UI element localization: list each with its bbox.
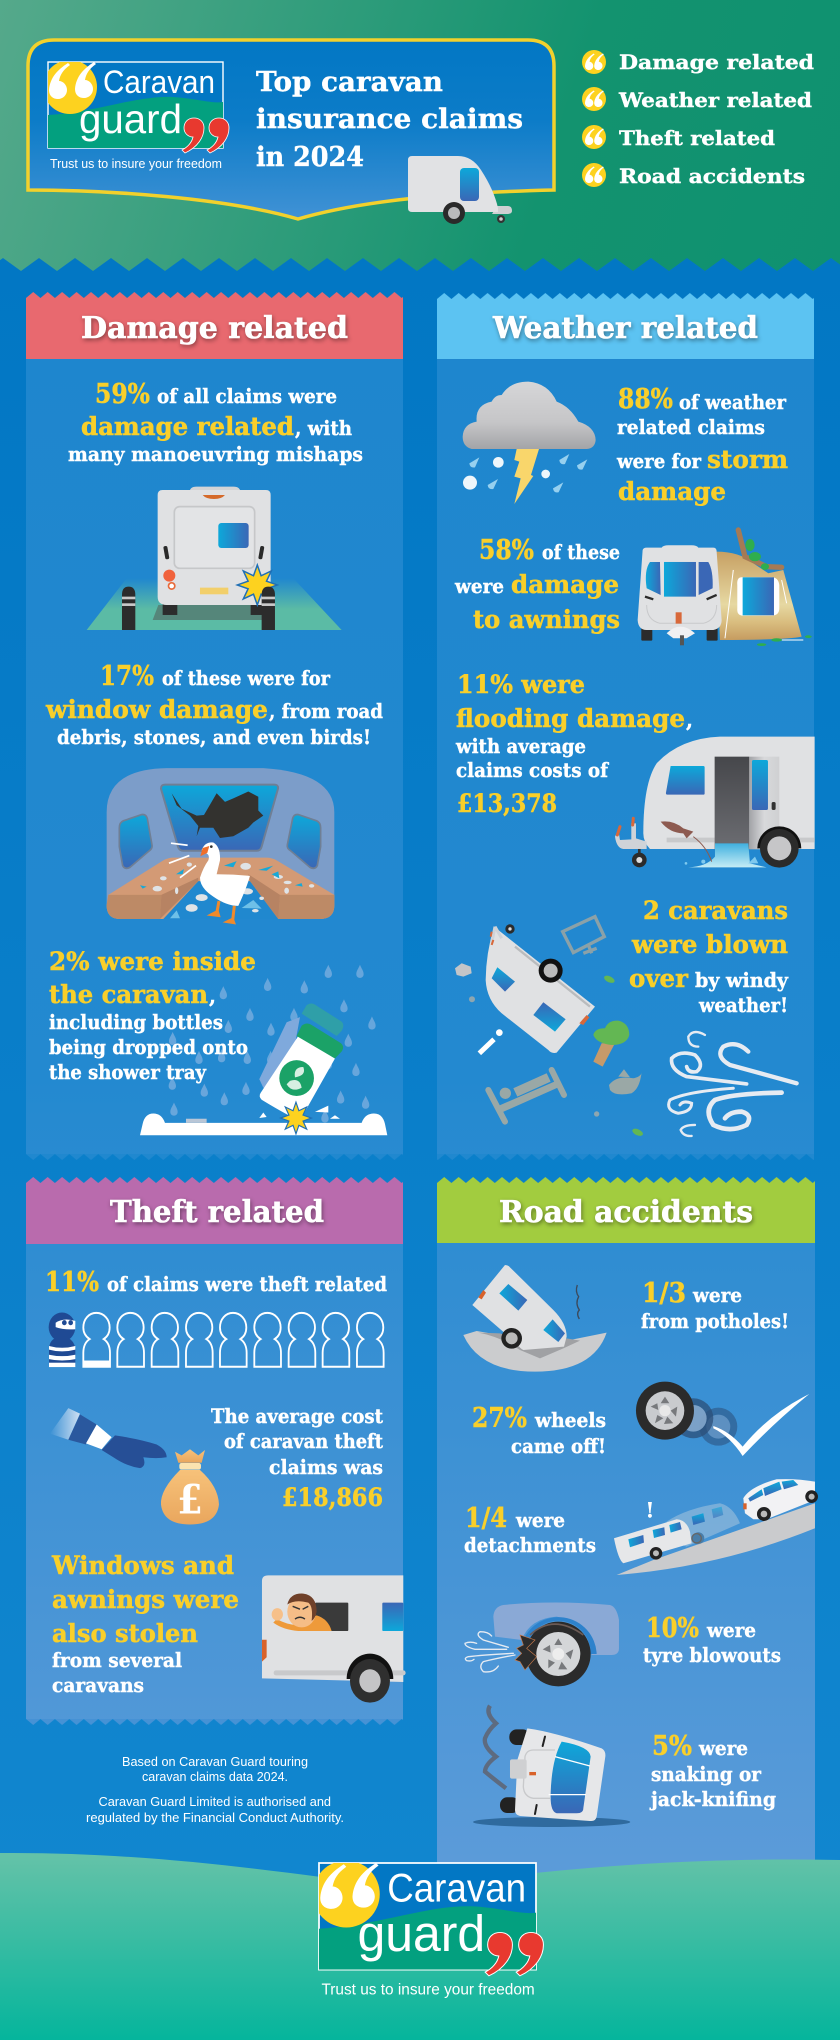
title: in 2024: [256, 142, 364, 173]
illustration: detached caravan on a slope: [614, 1479, 818, 1575]
text: 11% of claims: [45, 1267, 387, 1298]
title: [256, 67, 523, 173]
text: windows and awnings stolen: caravans: [52, 1673, 144, 1697]
text: 17% window damage: debris, stones, and even birds!: [57, 725, 371, 749]
text: 59% of claims: [68, 379, 363, 466]
pictogram: 1 in 10 figures: [49, 1313, 384, 1367]
text: 11% flooding damage: £13,378: [457, 789, 557, 818]
footnote text: caravan claims data 2024.: [142, 1770, 288, 1784]
text: 11% of claims: of claims were theft related: [107, 1272, 387, 1296]
illustration: caravan in pothole: [463, 1265, 607, 1372]
logo: footer Caravan Guard: Trust us to insure your freedom: [321, 1981, 535, 1998]
text: 27% wheels came off: [472, 1403, 606, 1458]
illustration: tyre blowout: [465, 1602, 630, 1827]
legend list: Road accidents: [619, 164, 805, 188]
text: 88% storm damage: [616, 384, 788, 506]
title: Top caravan: [256, 67, 443, 98]
text: 11% flooding damage: with average: [455, 734, 586, 758]
logo: footer Caravan Guard: guard: [357, 1905, 485, 1962]
text: windows and awnings stolen: from several: [52, 1648, 182, 1672]
text: 88% storm damage: related claims: [617, 415, 765, 439]
text: 1/3 potholes: from potholes!: [641, 1309, 789, 1333]
legend list: Theft related: [619, 126, 775, 150]
text: 2% inside the caravan: [49, 947, 256, 1084]
logo: Caravan Guard: Trust us to insure your freedom: [50, 157, 222, 171]
logo: footer Caravan Guard: [313, 1861, 543, 1998]
panel: road accidents: [437, 1177, 818, 1883]
text: 2 caravans blown over: were blown: [631, 930, 788, 959]
text: windows and awnings stolen: awnings were: [52, 1585, 239, 1614]
text: 2% inside the caravan: being dropped onto: [49, 1035, 248, 1059]
text: average theft cost: of caravan theft: [224, 1429, 384, 1453]
icon: storm cloud: [463, 382, 596, 504]
text: average theft cost: £18,866: [282, 1483, 383, 1512]
footnote text: [86, 1755, 344, 1825]
text: 1/3 potholes: were: [692, 1283, 742, 1307]
text: 2 caravans blown over: 2 caravans: [643, 896, 788, 925]
text: 88% storm damage: storm: [707, 445, 788, 474]
text: 59% of claims: damage related: [81, 412, 294, 441]
text: average theft cost: [211, 1404, 384, 1512]
text: 88% storm damage: of weather: [679, 390, 786, 414]
text: 2 caravans blown over: by windy: [695, 968, 789, 992]
text: 17% window damage: 17%: [100, 661, 154, 692]
text: 1/4 detachments: were: [515, 1508, 565, 1532]
illustration: goose and broken windscreen: [107, 768, 334, 924]
goose: [200, 842, 250, 924]
text: 2 caravans blown over: weather!: [698, 993, 788, 1017]
text: 1/4 detachments: 1/4: [465, 1503, 507, 1534]
illustration: caravan blown over with debris: [455, 917, 797, 1137]
figure: burglar: [49, 1313, 75, 1367]
text: average theft cost: claims was: [269, 1455, 383, 1479]
text: 10% tyre blowouts: were: [706, 1618, 756, 1642]
text: 2% inside the caravan: including bottles: [49, 1010, 223, 1034]
panel: damage related: [26, 292, 403, 1160]
text: 1/3 potholes: [641, 1278, 789, 1333]
panel: theft related: [26, 1177, 403, 1725]
illustration: flooded caravan with fish: [615, 737, 815, 868]
logo: footer Caravan Guard: Caravan: [387, 1866, 526, 1910]
text: 59% of claims: of all claims were: [157, 384, 337, 408]
text: windows and awnings stolen: Windows and: [51, 1551, 234, 1580]
illustration: hand reaching for money bag: [50, 1408, 219, 1525]
header band: [0, 0, 840, 271]
text: 2% inside the caravan: the shower tray: [49, 1060, 207, 1084]
illustration: wheel bouncing away: [636, 1382, 809, 1456]
text: 2% inside the caravan: the caravan: [49, 980, 208, 1009]
text: 58% damage to awnings: to awnings: [473, 605, 620, 634]
heading: damage related: Damage related: [81, 311, 348, 346]
heading: road accidents: Road accidents: [499, 1195, 753, 1230]
icon: escaping air: [465, 1632, 515, 1672]
illustration: overturned caravan: [473, 1706, 630, 1827]
header banner: [28, 40, 554, 224]
text: 27% wheels came off: came off!: [511, 1434, 606, 1458]
footnote text: Based on Caravan Guard touring: [122, 1755, 308, 1769]
text: 1/3 potholes: 1/3: [642, 1278, 686, 1309]
text: 5% snaking or jack-knifing: jack-knifing: [649, 1787, 776, 1811]
text: 17% window damage: , from road: [269, 699, 383, 723]
text: 88% storm damage: damage: [618, 477, 726, 506]
text: 58% damage to awnings: were: [454, 574, 504, 598]
text: 10% tyre blowouts: [643, 1613, 781, 1667]
text: 5% snaking or jack-knifing: [649, 1731, 776, 1811]
logo: Caravan Guard: guard: [79, 96, 182, 142]
footer band: [0, 1853, 840, 2040]
text: 2% inside the caravan: ,: [209, 984, 216, 1008]
text: 27% wheels came off: 27%: [472, 1403, 527, 1434]
heading: weather related: Weather related: [492, 311, 758, 346]
logo: Caravan Guard: Caravan: [103, 64, 215, 100]
text: 17% window damage: window damage: [45, 695, 268, 724]
illustration: caravan reversing into bollard: [87, 487, 342, 630]
footnote text: Caravan Guard Limited is authorised and: [98, 1795, 331, 1809]
panel: weather related: [437, 293, 815, 1160]
illustration: angry man at caravan window: [262, 1575, 403, 1703]
text: 17% window damage: [45, 661, 383, 749]
title: insurance claims: [256, 104, 523, 135]
illustration: bottle dropped on shower tray: [140, 965, 387, 1135]
legend list: [582, 50, 814, 188]
text: 58% damage to awnings: of these: [542, 540, 620, 564]
icon: money bag: £: [177, 1477, 203, 1524]
heading: theft related: Theft related: [110, 1195, 324, 1230]
text: 11% flooding damage: 11% were: [457, 670, 585, 699]
text: 1/4 detachments: detachments: [464, 1533, 596, 1557]
icon: caravan: [408, 156, 512, 224]
text: 5% snaking or jack-knifing: snaking or: [651, 1762, 761, 1786]
text: 58% damage to awnings: [454, 535, 620, 634]
icon: wind swirls: [669, 1032, 797, 1136]
text: windows and awnings stolen: [51, 1551, 239, 1697]
text: 59% of claims: , with: [295, 416, 352, 440]
text: 11% flooding damage: flooding damage: [456, 704, 685, 733]
footnote text: regulated by the Financial Conduct Authority.: [86, 1811, 344, 1825]
text: 58% damage to awnings: damage: [511, 570, 619, 599]
text: 59% of claims: many manoeuvring mishaps: [68, 442, 363, 466]
text: 27% wheels came off: wheels: [534, 1408, 606, 1432]
text: 5% snaking or jack-knifing: 5%: [652, 1731, 692, 1762]
text: 2 caravans blown over: over: [629, 964, 689, 993]
text: 2 caravans blown over: [629, 896, 789, 1017]
illustration: detached caravan on a slope: !: [645, 1498, 655, 1523]
text: average theft cost: The average cost: [211, 1404, 384, 1428]
text: 10% tyre blowouts: 10%: [646, 1613, 699, 1644]
text: 11% flooding damage: claims costs of: [456, 758, 609, 782]
logo: Caravan Guard: [43, 60, 229, 171]
icon: money bag: [161, 1449, 219, 1525]
text: 59% of claims: 59%: [95, 379, 150, 410]
text: 11% flooding damage: ,: [686, 708, 693, 732]
text: 58% damage to awnings: 58%: [479, 535, 534, 566]
text: windows and awnings stolen: also stolen: [52, 1619, 198, 1648]
text: 2% inside the caravan: 2% were inside: [49, 947, 256, 976]
text: 11% of claims: 11%: [45, 1267, 99, 1298]
text: 5% snaking or jack-knifing: were: [698, 1736, 748, 1760]
legend list: Damage related: [619, 50, 814, 74]
text: 10% tyre blowouts: tyre blowouts: [643, 1643, 781, 1667]
illustration: caravan with damaged awning: [638, 530, 812, 646]
text: 11% flooding damage: [455, 670, 693, 818]
text: 88% storm damage: 88%: [618, 384, 673, 415]
legend list: Weather related: [618, 88, 812, 112]
text: 1/4 detachments: [464, 1503, 596, 1557]
text: 17% window damage: of these were for: [162, 666, 330, 690]
text: 88% storm damage: were for: [616, 449, 701, 473]
